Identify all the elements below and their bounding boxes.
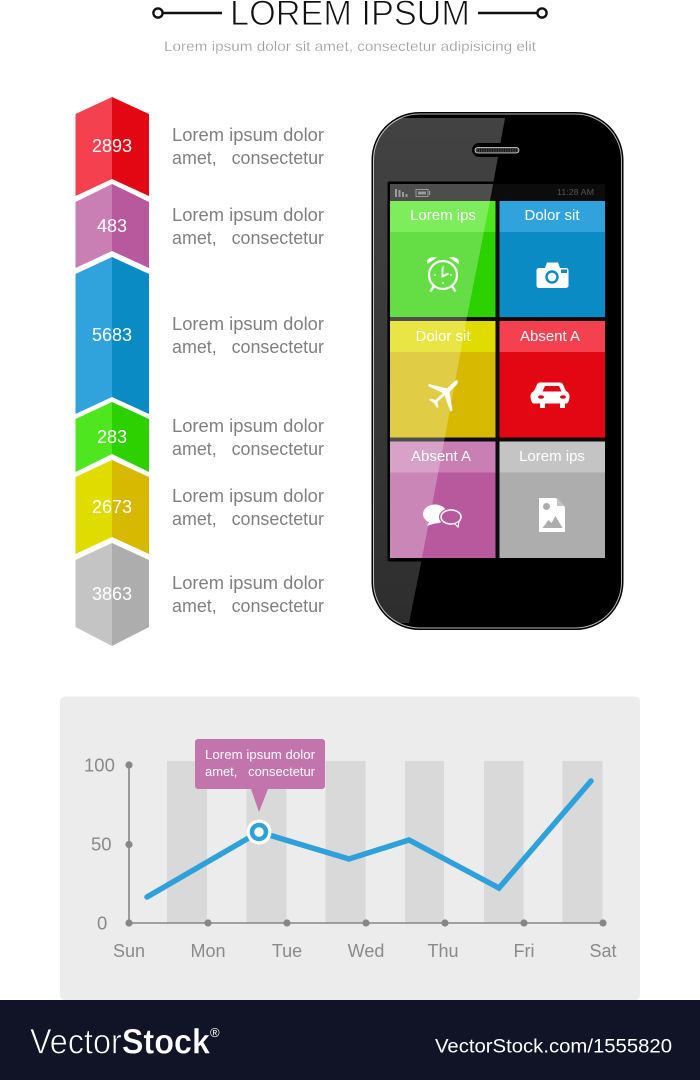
callout: Lorem ipsum dolor <box>205 748 315 762</box>
icon: chat bubbles <box>423 504 462 527</box>
footer bar <box>0 1000 700 1080</box>
status bar: 11:28 AM <box>557 187 594 197</box>
text block 6: Lorem ipsum dolor <box>172 573 324 593</box>
tile labels: Lorem ips <box>410 207 476 224</box>
text block 5: amet, consectetur <box>172 509 324 529</box>
speaker <box>472 143 520 157</box>
text block 4: Lorem ipsum dolor <box>172 416 324 436</box>
tile labels: Dolor sit <box>415 328 471 345</box>
chevron descriptions <box>172 125 324 616</box>
chevron: blue 5683 <box>76 257 149 414</box>
tile labels: Absent A <box>411 448 471 465</box>
chevron column <box>76 97 149 646</box>
x axis labels: Sun <box>113 941 145 961</box>
chevron: grey 3863: 3863 <box>92 584 132 604</box>
text block 3: Lorem ipsum dolor <box>172 314 324 334</box>
chevron: blue 5683: 5683 <box>92 325 132 345</box>
x axis labels <box>113 941 617 961</box>
tile: red car <box>500 321 605 438</box>
status bar <box>395 187 594 197</box>
text block 2 <box>172 205 324 248</box>
tile labels: Lorem ips <box>519 448 585 465</box>
x axis labels: Tue <box>272 941 302 961</box>
panel: line chart <box>60 696 640 1000</box>
data line <box>147 781 591 897</box>
text block 2: Lorem ipsum dolor <box>172 205 324 225</box>
logo: VectorStock <box>30 1022 210 1062</box>
chevron: yellow 2673 <box>76 460 149 554</box>
callout: amet, consectetur <box>205 765 315 779</box>
text block 1: Lorem ipsum dolor <box>172 125 324 145</box>
chevron: red 2893 <box>76 97 149 196</box>
chart axes <box>125 761 607 927</box>
text block 4 <box>172 416 324 459</box>
subtitle: Lorem ipsum dolor sit amet, consectetur adipisicing elit <box>164 38 536 54</box>
icon: alarm clock <box>427 257 459 292</box>
chevron: green 283 <box>76 402 149 472</box>
tile labels: Absent A <box>520 328 580 345</box>
y axis labels: 0 <box>97 912 107 934</box>
text block 4: amet, consectetur <box>172 439 324 459</box>
chevron: purple 483: 483 <box>97 216 127 236</box>
x axis labels: Fri <box>514 941 534 961</box>
tile labels <box>410 207 585 465</box>
icon: car <box>530 382 570 408</box>
text block 5: Lorem ipsum dolor <box>172 486 324 506</box>
y axis labels: 100 <box>84 754 115 776</box>
text block 6: amet, consectetur <box>172 596 324 616</box>
icon: camera <box>536 262 568 288</box>
icon: airplane <box>428 380 458 412</box>
icon: picture document <box>539 498 565 532</box>
text block 1 <box>172 125 324 168</box>
x axis labels: Sat <box>589 941 617 961</box>
y axis labels <box>84 754 115 934</box>
tile: blue camera <box>500 201 605 317</box>
chevron: red 2893: 2893 <box>92 136 132 156</box>
tile: green alarm clock <box>390 201 496 317</box>
x axis labels: Mon <box>190 941 226 961</box>
image id: VectorStock.com/1555820 <box>435 1036 672 1058</box>
title <box>153 0 547 33</box>
text block 2: amet, consectetur <box>172 228 324 248</box>
tile: yellow plane <box>390 321 496 438</box>
callout <box>195 739 325 812</box>
text block 6 <box>172 573 324 616</box>
chevron: yellow 2673: 2673 <box>92 497 132 517</box>
data point marker <box>246 820 272 844</box>
x axis labels: Wed <box>348 941 384 961</box>
text block 1: amet, consectetur <box>172 148 324 168</box>
text block 5 <box>172 486 324 529</box>
chevron: green 283: 283 <box>97 427 127 447</box>
tile: purple chat <box>390 442 496 558</box>
chevron: purple 483 <box>76 184 149 268</box>
chevron: grey 3863 <box>76 543 149 646</box>
tile labels: Dolor sit <box>524 207 580 224</box>
phone <box>370 112 624 630</box>
x axis labels: Thu <box>427 941 459 961</box>
text block 3: amet, consectetur <box>172 337 324 357</box>
tile: grey picture <box>500 442 605 558</box>
y axis labels: 50 <box>91 834 112 854</box>
registered mark: ® <box>210 1025 220 1040</box>
text block 3 <box>172 314 324 357</box>
